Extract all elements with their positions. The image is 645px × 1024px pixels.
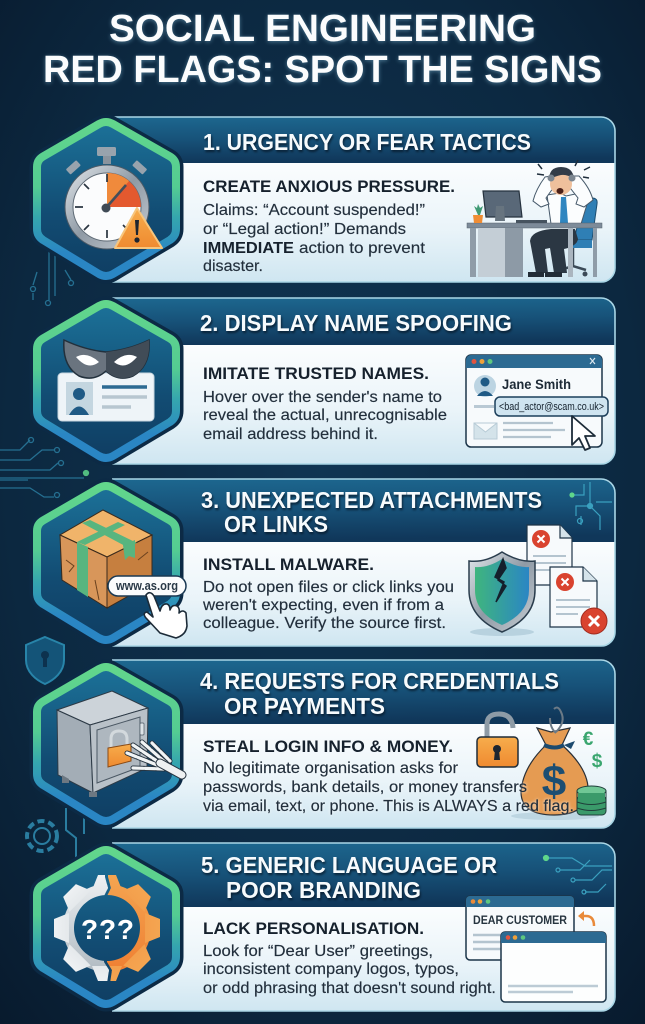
panel 2 description: email address behind it. <box>203 426 378 443</box>
illustration: cracked shield and flagged documents <box>469 525 607 636</box>
panel 5 description <box>203 943 496 997</box>
panel 3 heading <box>201 487 542 537</box>
panel 4 description <box>203 760 574 815</box>
gear: silver half <box>54 875 109 981</box>
panel 1 description: IMMEDIATE <box>203 240 294 257</box>
panel 5 description: or odd phrasing that doesn't sound right. <box>203 980 496 997</box>
panel 1 description: action to prevent <box>299 240 426 257</box>
panel 5 heading: POOR BRANDING <box>226 877 421 903</box>
illustration: open padlock, money bag and coins: $ <box>592 751 603 772</box>
gear: orange half <box>107 875 160 981</box>
icon: background gear <box>27 808 86 858</box>
panel 4 description: via email, text, or phone. This is ALWAYS a red flag. <box>203 798 574 815</box>
illustration: open padlock, money bag and coins <box>477 708 606 820</box>
panel 3 header <box>112 479 615 542</box>
panel 3 description: colleague. Verify the source first. <box>203 615 446 632</box>
illustration: email window with hover tooltip: <bad_actor@scam.co.uk> <box>499 401 604 413</box>
panel 1 body <box>112 163 615 282</box>
panel 2 description: Hover over the sender's name to <box>203 389 442 406</box>
panel 4 subheading: STEAL LOGIN INFO & MONEY. <box>203 737 453 756</box>
panel 5 header <box>112 843 615 907</box>
panel 5 description: inconsistent company logos, typos, <box>203 961 459 978</box>
panel 1 heading: 1. URGENCY OR FEAR TACTICS <box>203 129 531 155</box>
panel 1: urgency or fear tactics <box>112 117 615 282</box>
panel 4 body <box>112 724 615 828</box>
panel 2: display name spoofing <box>112 298 615 464</box>
panel 1 description: disaster. <box>203 258 263 275</box>
decorative circuit: upper left <box>30 250 74 306</box>
illustration: email window with hover tooltip <box>466 355 608 450</box>
panel 4 outline <box>112 660 615 828</box>
panel 1 description <box>203 202 426 275</box>
panel 5 description: Look for “Dear User” greetings, <box>203 943 433 960</box>
panel 3 body <box>112 542 615 646</box>
illustration: open padlock, money bag and coins: € <box>583 729 594 750</box>
panel 1 description: or “Legal action!” Demands <box>203 221 406 238</box>
icon badge 1: stopwatch and warning <box>37 122 176 276</box>
illustration: open padlock, money bag and coins: $ <box>542 757 566 806</box>
illustration: stressed worker at desk <box>467 160 602 277</box>
panel 4 heading: OR PAYMENTS <box>224 693 385 719</box>
panel 4: requests for credentials or payments <box>112 660 615 828</box>
panel 1 subheading: CREATE ANXIOUS PRESSURE. <box>203 177 455 196</box>
illustration: email window with hover tooltip: Jane Smith <box>502 377 571 392</box>
panel 4 description: passwords, bank details, or money transfers <box>203 779 527 796</box>
icon badge 4: safe with skeleton hand <box>37 667 182 821</box>
panel 1 header <box>112 117 615 163</box>
panel 2 header <box>112 298 615 345</box>
panel 5 outline <box>112 843 615 1011</box>
panel 2 subheading: IMITATE TRUSTED NAMES. <box>203 364 429 383</box>
title: SOCIAL ENGINEERING <box>109 8 536 50</box>
panel 4 heading <box>200 668 559 719</box>
panel 1 description: Claims: “Account suspended!” <box>203 202 425 219</box>
question marks: ??? <box>81 914 134 945</box>
panel 5 body <box>112 907 615 1011</box>
panel 5 heading: 5. GENERIC LANGUAGE OR <box>201 852 497 878</box>
panel 3 subheading: INSTALL MALWARE. <box>203 555 374 574</box>
icon badge 2: mask and ID card <box>37 304 176 458</box>
panel 3 description: weren't expecting, even if from a <box>202 597 444 614</box>
panel 2 description: reveal the actual, unrecognisable <box>203 407 447 424</box>
illustration: generic email windows: DEAR CUSTOMER <box>473 913 567 927</box>
title: RED FLAGS: SPOT THE SIGNS <box>43 49 602 91</box>
circuit lines in panel 3 header <box>570 482 612 530</box>
icon: background shield <box>26 637 64 684</box>
circuit lines in panel 5 header <box>544 856 612 894</box>
panel 4 heading: 4. REQUESTS FOR CREDENTIALS <box>200 668 559 694</box>
panel 1 outline <box>112 117 615 282</box>
icon badge 3: damaged package and link click: www.as.org <box>115 578 178 593</box>
panel 5 subheading: LACK PERSONALISATION. <box>203 919 424 938</box>
icon badge 3: damaged package and link click <box>37 486 187 640</box>
panel 3: unexpected attachments or links <box>112 479 615 646</box>
panel 2 description <box>203 389 447 443</box>
panel 4 header <box>112 660 615 724</box>
icon badge 5: hexagon frame <box>37 850 176 1004</box>
panel 3 heading: OR LINKS <box>224 511 328 537</box>
panel 4 description: No legitimate organisation asks for <box>203 760 459 777</box>
illustration: generic email windows <box>466 896 606 1002</box>
panel 2 outline <box>112 298 615 464</box>
panel 3 description <box>202 579 454 632</box>
panel 3 description: Do not open files or click links you <box>203 579 454 596</box>
panel 3 outline <box>112 479 615 646</box>
decorative circuit: middle left <box>0 438 88 498</box>
panel 5: generic language or poor branding <box>112 843 615 1011</box>
title <box>43 8 602 91</box>
panel 5 heading <box>201 852 497 903</box>
panel 3 heading: 3. UNEXPECTED ATTACHMENTS <box>201 487 542 513</box>
panel 2 heading: 2. DISPLAY NAME SPOOFING <box>200 310 512 336</box>
panel 2 body <box>112 345 615 464</box>
